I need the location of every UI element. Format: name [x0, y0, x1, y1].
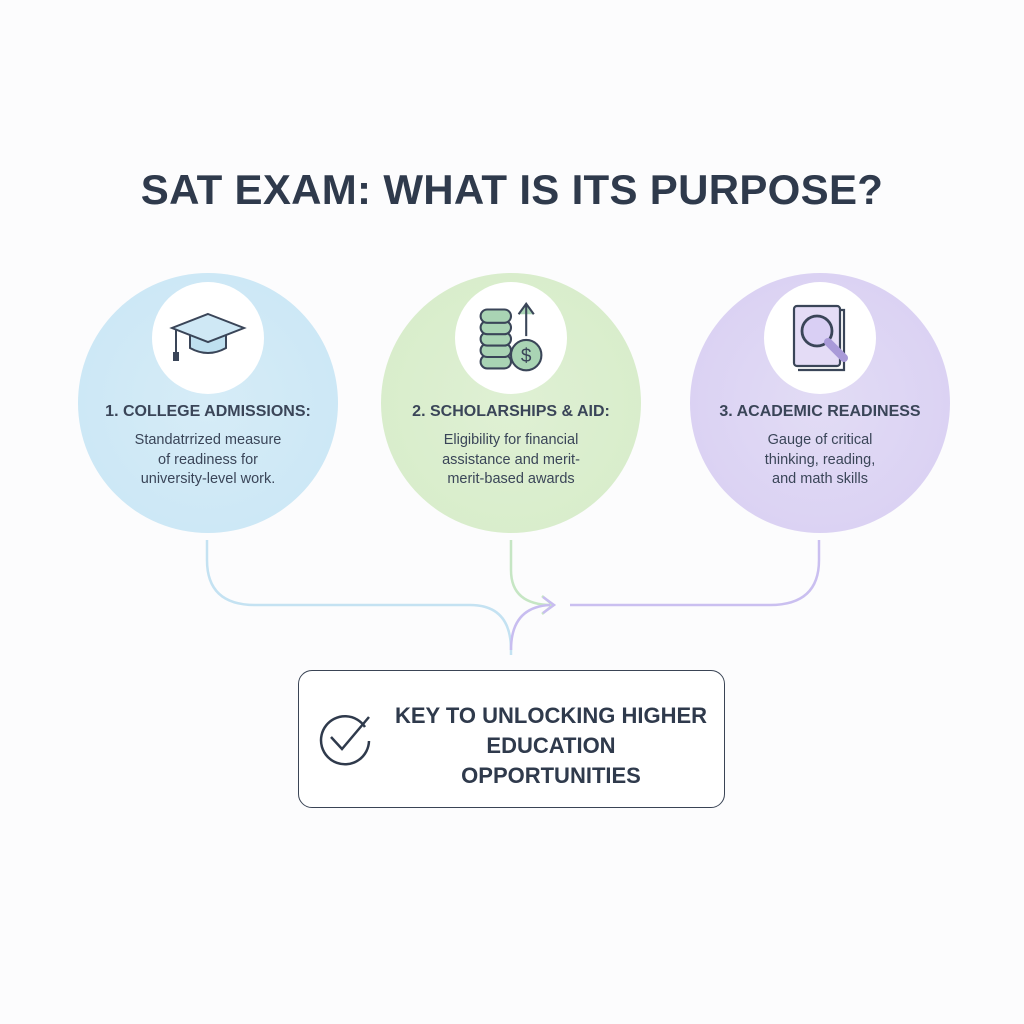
callout text [395, 703, 707, 788]
icon: coins with arrow [455, 282, 567, 394]
icon: graduation cap [152, 282, 264, 394]
description: Eligibility for financial [444, 432, 578, 448]
description: assistance and merit- [442, 452, 580, 468]
description: university-level work. [141, 471, 275, 487]
description [442, 432, 580, 487]
description: merit-based awards [447, 471, 575, 487]
description [135, 432, 281, 487]
description [764, 432, 875, 487]
callout text: OPPORTUNITIES [461, 763, 641, 788]
description: Standatrrized measure [135, 432, 281, 448]
callout text: EDUCATION [486, 733, 616, 758]
icon: coins with arrow: $ [521, 346, 532, 367]
panel: college admissions [78, 273, 338, 533]
heading: 2. SCHOLARSHIPS & AID: [412, 403, 610, 420]
description: of readiness for [158, 452, 258, 468]
callout text: KEY TO UNLOCKING HIGHER [395, 703, 707, 728]
title: SAT EXAM: WHAT IS ITS PURPOSE? [141, 166, 883, 213]
panel: academic readiness [690, 273, 950, 533]
panel: scholarships [381, 273, 641, 533]
heading: 3. ACADEMIC READINESS [719, 403, 921, 420]
heading: 1. COLLEGE ADMISSIONS: [105, 403, 311, 420]
description: and math skills [772, 471, 868, 487]
description: thinking, reading, [765, 452, 875, 468]
icon: book with magnifier [764, 282, 876, 394]
callout box [298, 670, 725, 808]
description: Gauge of critical [768, 432, 872, 448]
icon: check circle [320, 715, 370, 766]
